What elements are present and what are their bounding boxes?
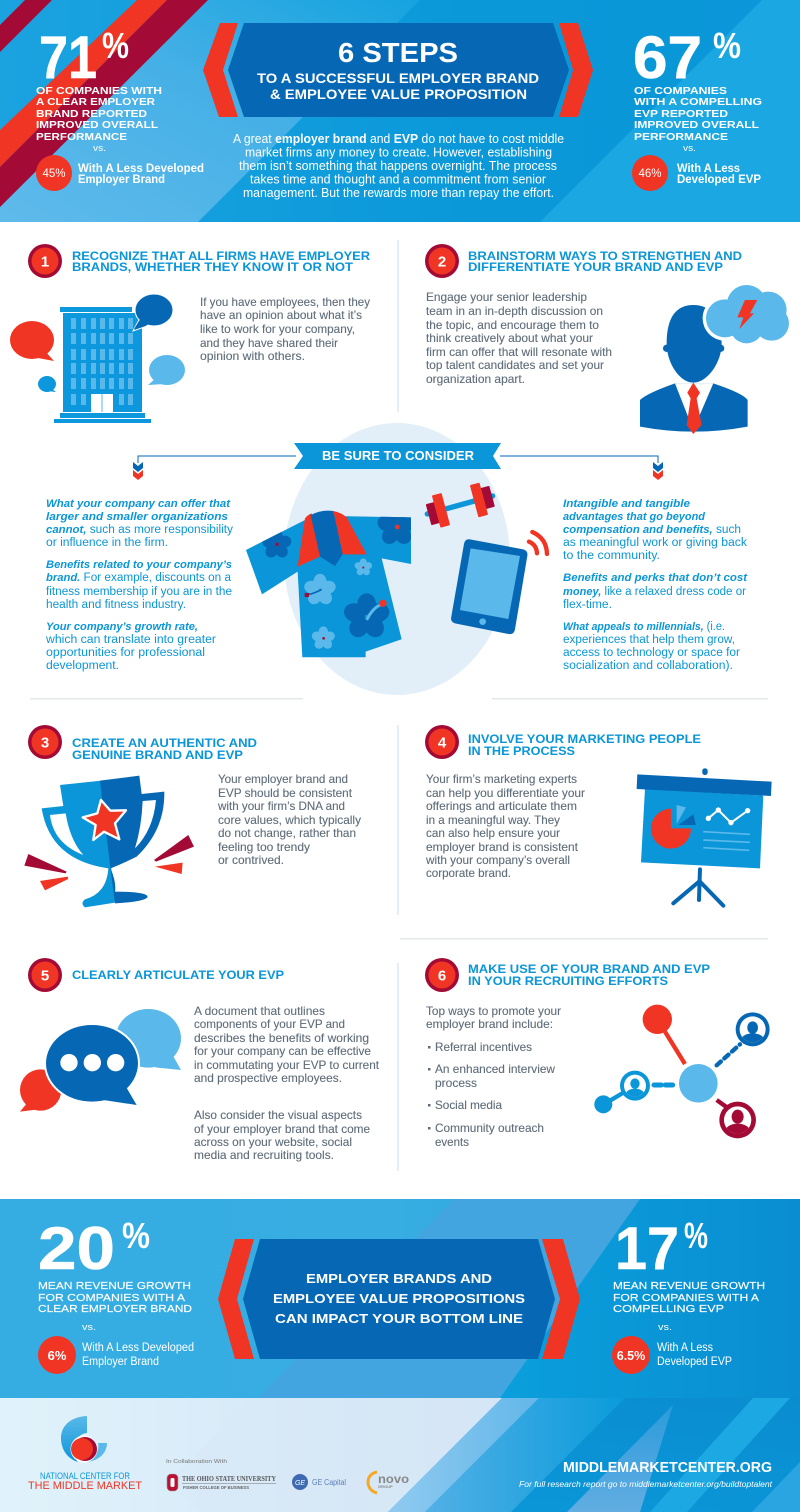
connector lines and chevrons (133, 456, 663, 480)
step 6 text: process (435, 1076, 477, 1090)
step 4 text: offerings and articulate them (426, 799, 577, 813)
panel: be sure to consider (45, 423, 748, 695)
stat: 67 percent: 67 (633, 24, 702, 91)
stat: 71 percent: With A Less Developed (78, 163, 204, 175)
number badge 3: 3 (41, 734, 49, 752)
number badge 1 (28, 244, 62, 278)
considerations left: or influence in the firm. (46, 537, 168, 549)
step 6 text: An enhanced interview (435, 1062, 555, 1076)
stat: 20 percent: CLEAR EMPLOYER BRAND (38, 1303, 192, 1315)
considerations right: advantages that go beyond (563, 511, 705, 523)
step 2 text: Engage your senior leadership (426, 290, 587, 304)
logo: GE Capital: GE (295, 1480, 305, 1487)
stat: 71 percent: 45% (42, 168, 66, 180)
stat: 17 percent: 17 (615, 1215, 679, 1282)
step 3 text (217, 772, 361, 867)
considerations right: access to technology or space for (563, 647, 740, 659)
intro paragraph: market firms any money to create. However, establishing (245, 146, 552, 160)
icon: trophy with star (24, 776, 194, 907)
stat: 20 percent: 20 (38, 1215, 115, 1282)
banner: bottom line message (218, 1239, 580, 1359)
step 6 text: employer brand include: (426, 1017, 553, 1031)
title (257, 37, 539, 102)
number badge 5 (28, 958, 62, 992)
research report note: For full research report go to middlemarketcenter.org/buildtoptalent (519, 1479, 773, 1489)
step 5 text: and prospective employees. (194, 1071, 342, 1085)
considerations left (45, 498, 233, 672)
step 6 heading (468, 964, 710, 988)
step 2 heading (468, 251, 742, 274)
stat: 71 percent: 71 (39, 24, 97, 91)
panel: bottom line band (0, 1199, 800, 1398)
step 5 text: of your employer brand that come (194, 1122, 370, 1136)
stat: 17 percent: MEAN REVENUE GROWTH (613, 1280, 765, 1292)
step 1 text: like to work for your company, (200, 322, 355, 336)
intro paragraph: management. But the rewards more than repay the effort. (243, 186, 554, 200)
icon: businessman with storm cloud (640, 282, 789, 434)
step 5 text: describes the benefits of working (194, 1031, 369, 1045)
intro paragraph: A great employer brand and EVP do not have to cost middle (233, 132, 564, 146)
intro paragraph (233, 132, 564, 200)
logo: GE Capital: GE Capital (312, 1478, 346, 1487)
stat: 20 percent: Employer Brand (82, 1356, 159, 1368)
step 4 text: can help you differentiate your (426, 786, 585, 800)
number badge 2 (425, 244, 459, 278)
stat: 20 percent: MEAN REVENUE GROWTH (38, 1280, 191, 1292)
banner: bottom line message: EMPLOYER BRANDS AND (306, 1271, 492, 1286)
logo: novo group (368, 1472, 409, 1493)
step 6 text: Top ways to promote your (426, 1004, 561, 1018)
stat: 67 percent: OF COMPANIES (634, 85, 727, 97)
step 2 text: top talent candidates and set your (426, 358, 604, 372)
logo: national center for the middle market: THE MIDDLE MARKET (28, 1480, 142, 1492)
stat: 67 percent: Developed EVP (677, 174, 761, 186)
step 5 text: in commutating your EVP to current (194, 1058, 380, 1072)
step 4 heading: INVOLVE YOUR MARKETING PEOPLE (468, 734, 701, 746)
collaboration label: In Collaboration With (166, 1459, 227, 1465)
step 4 text: employer brand is consistent (426, 840, 579, 854)
stat: 71 percent: IMPROVED OVERALL (36, 119, 159, 131)
number badge 4: 4 (438, 734, 447, 752)
icon: hawaiian shirt (246, 507, 418, 657)
step 6 text (426, 1004, 561, 1149)
intro paragraph: them isn’t something that happens overnight. The process (239, 159, 557, 173)
stat: 67 percent: PERFORMANCE (634, 131, 728, 143)
logo: GE Capital (292, 1474, 346, 1490)
step 2 text: organization apart. (426, 372, 525, 386)
considerations right: Intangible and tangible (563, 498, 690, 510)
step 4 text: can also help ensure your (426, 826, 560, 840)
step 2 text: think creatively about what your (426, 331, 593, 345)
considerations right: as meaningful work or giving back (563, 537, 747, 549)
step 5 text: Also consider the visual aspects (194, 1108, 362, 1122)
step 4 heading (468, 734, 701, 758)
stat: 17 percent: COMPELLING EVP (613, 1303, 724, 1315)
step 1 heading: RECOGNIZE THAT ALL FIRMS HAVE EMPLOYER (72, 251, 371, 263)
step 6 heading: IN YOUR RECRUITING EFFORTS (468, 976, 668, 988)
step 5 text: across on your website, social (194, 1135, 352, 1149)
step 5 text: components of your EVP and (194, 1017, 345, 1031)
stat: 17 percent: % (684, 1215, 708, 1256)
step 3 text: core values, which typically (218, 813, 361, 827)
banner: bottom line message: CAN IMPACT YOUR BOTTOM LINE (275, 1311, 523, 1326)
icon: conversation bubbles (20, 1009, 181, 1112)
panel: header (0, 0, 800, 222)
step 4 text (425, 772, 585, 880)
considerations right: Benefits and perks that don’t cost (563, 572, 748, 584)
stat: 71 percent: OF COMPANIES WITH (36, 85, 162, 97)
considerations left: Your company’s growth rate, (46, 621, 198, 633)
panel: step 1 (10, 244, 371, 423)
logo: ohio state university: FISHER COLLEGE OF BUSINESS (183, 1485, 249, 1490)
considerations left: What your company can offer that (46, 498, 231, 510)
stat: 71 percent: vs. (93, 143, 106, 153)
step 6 text: Social media (435, 1098, 502, 1112)
stat: 67 percent: vs. (683, 143, 696, 153)
considerations right: What appeals to millennials, (i.e. (563, 621, 725, 633)
step 3 heading: CREATE AN AUTHENTIC AND (72, 738, 257, 750)
panel: step 4 (425, 725, 772, 906)
logo: ohio state university (167, 1474, 276, 1491)
stat: 67 percent: IMPROVED OVERALL (634, 119, 760, 131)
step 6 text: Referral incentives (435, 1040, 532, 1054)
stat: 67 percent: % (713, 25, 741, 66)
background ellipse and illustrations (246, 423, 547, 695)
step 4 text: corporate brand. (426, 866, 511, 880)
considerations left: which can translate into greater (45, 634, 216, 646)
considerations left: larger and smaller organizations (46, 511, 228, 523)
stat: 71 percent: % (102, 25, 129, 66)
stat: 71 percent (36, 24, 204, 191)
stat: 17 percent: Developed EVP (657, 1356, 732, 1368)
step 2 heading: BRAINSTORM WAYS TO STRENGTHEN AND (468, 251, 742, 263)
title: 6 STEPS (338, 37, 458, 68)
step 3 text: with your firm’s DNA and (217, 799, 345, 813)
stat: 71 percent: PERFORMANCE (36, 131, 127, 143)
step 2 text: team in an in-depth discussion on (426, 304, 603, 318)
step 2 heading: DIFFERENTIATE YOUR BRAND AND EVP (468, 262, 723, 274)
number badge 5: 5 (41, 968, 49, 984)
stat: 67 percent: With A Less (677, 163, 740, 175)
considerations left: fitness membership if you are in the (46, 586, 232, 598)
number badge 2: 2 (438, 254, 446, 270)
stat: 20 percent: 6% (48, 1348, 67, 1363)
banner: be sure to consider: BE SURE TO CONSIDER (322, 448, 475, 463)
banner: title ribbon (203, 23, 593, 117)
logo: novo group: novo (378, 1472, 409, 1486)
step 6 text: events (435, 1135, 469, 1149)
banner: be sure to consider (294, 443, 501, 469)
step 3 text: or contrived. (218, 853, 284, 867)
stat: 17 percent: FOR COMPANIES WITH A (613, 1292, 759, 1304)
considerations right: money, like a relaxed dress code or (563, 586, 746, 598)
banner: bottom line message: EMPLOYEE VALUE PROPOSITIONS (273, 1291, 525, 1306)
step 1 heading: BRANDS, WHETHER THEY KNOW IT OR NOT (72, 262, 353, 274)
number badge 6 (425, 958, 459, 992)
icon: office building with speech bubbles (10, 294, 185, 423)
considerations left: opportunities for professional (46, 647, 205, 659)
step 3 heading: GENUINE BRAND AND EVP (72, 750, 243, 762)
step 2 text: firm can offer that will resonate with (426, 345, 612, 359)
title: TO A SUCCESSFUL EMPLOYER BRAND (257, 71, 539, 86)
stat: 71 percent: BRAND REPORTED (36, 108, 147, 120)
icon: presentation board (637, 768, 772, 906)
step 1 text: If you have employees, then they (200, 295, 370, 309)
step 4 text: with your company’s overall (425, 853, 570, 867)
step 5 text: for your company can be effective (194, 1044, 371, 1058)
stat: 71 percent: A CLEAR EMPLOYER (36, 96, 155, 108)
step 5 text: A document that outlines (194, 1004, 325, 1018)
considerations left: Benefits related to your company’s (46, 559, 232, 571)
icon: people network (594, 1005, 770, 1140)
stat: 17 percent: With A Less (657, 1342, 713, 1354)
step 3 text: do not change, rather than (218, 826, 356, 840)
logo: ohio state university: THE OHIO STATE UNIVERSITY (182, 1475, 276, 1483)
considerations right: compensation and benefits, such (563, 524, 741, 536)
stat: 17 percent: 6.5% (617, 1349, 645, 1363)
step 6 heading: MAKE USE OF YOUR BRAND AND EVP (468, 964, 710, 976)
icon: tablet with wifi signal (451, 532, 547, 634)
considerations right (563, 498, 748, 672)
step 1 text: and they have shared their (200, 336, 338, 350)
considerations left: health and fitness industry. (46, 599, 186, 611)
considerations right: experiences that help them grow, (563, 634, 735, 646)
step 1 heading (72, 251, 371, 274)
logo: national center for the middle market: NATIONAL CENTER FOR (40, 1471, 130, 1481)
step 3 text: Your employer brand and (218, 772, 348, 786)
step 4 heading: IN THE PROCESS (468, 746, 575, 758)
panel: step 2 (425, 244, 789, 434)
panel: step 3 (24, 725, 361, 907)
step 1 text (200, 295, 370, 363)
number badge 6: 6 (438, 968, 446, 984)
step 1 text: have an opinion about what it’s (200, 308, 362, 322)
title: & EMPLOYEE VALUE PROPOSITION (270, 87, 527, 102)
stat: 20 percent: FOR COMPANIES WITH A (38, 1292, 185, 1304)
number badge 1: 1 (41, 254, 49, 270)
step 2 text (426, 290, 612, 386)
considerations right: socialization and collaboration). (563, 660, 733, 672)
considerations left: development. (46, 660, 119, 672)
logo: national center for the middle market (28, 1416, 142, 1492)
stat: 20 percent: % (122, 1215, 150, 1256)
stat: 17 percent: vs. (658, 1322, 672, 1332)
step 3 text: EVP should be consistent (218, 786, 353, 800)
stat: 71 percent: Employer Brand (78, 174, 165, 186)
step 4 text: Your firm’s marketing experts (426, 772, 577, 786)
intro paragraph: takes time and thought and a commitment from senior (250, 172, 546, 186)
stat: 67 percent: WITH A COMPELLING (634, 96, 762, 108)
stat: 67 percent: EVP REPORTED (634, 108, 728, 120)
stat: 20 percent: With A Less Developed (82, 1342, 194, 1354)
number badge 3 (28, 725, 62, 759)
stat: 17 percent (612, 1215, 765, 1374)
step 2 text: the topic, and encourage them to (426, 318, 599, 332)
stat: 20 percent (38, 1215, 194, 1374)
panel: footer (0, 1398, 800, 1512)
icon: dumbbell (426, 483, 495, 528)
step 3 text: feeling too trendy (218, 840, 310, 854)
stat: 67 percent (632, 24, 762, 191)
step 1 text: opinion with others. (200, 349, 305, 363)
considerations right: to the community. (563, 550, 660, 562)
step 6 text: Community outreach (435, 1121, 544, 1135)
stat: 20 percent: vs. (82, 1322, 96, 1332)
step 4 text: in a meaningful way. They (426, 813, 560, 827)
step 5 text (194, 1004, 380, 1162)
website url: MIDDLEMARKETCENTER.ORG (563, 1460, 772, 1476)
panel: step 5 (20, 958, 380, 1162)
stat: 67 percent: 46% (638, 168, 662, 180)
considerations left: cannot, such as more responsibility (46, 524, 233, 536)
considerations left: brand. For example, discounts on a (46, 572, 232, 584)
panel: step 6 (425, 958, 770, 1149)
step 5 text: media and recruiting tools. (194, 1148, 334, 1162)
number badge 4 (425, 725, 459, 759)
logo: novo group: GROUP (378, 1484, 393, 1489)
considerations right: flex-time. (563, 599, 612, 611)
step 3 heading (72, 738, 257, 762)
step 5 heading: CLEARLY ARTICULATE YOUR EVP (72, 970, 284, 982)
